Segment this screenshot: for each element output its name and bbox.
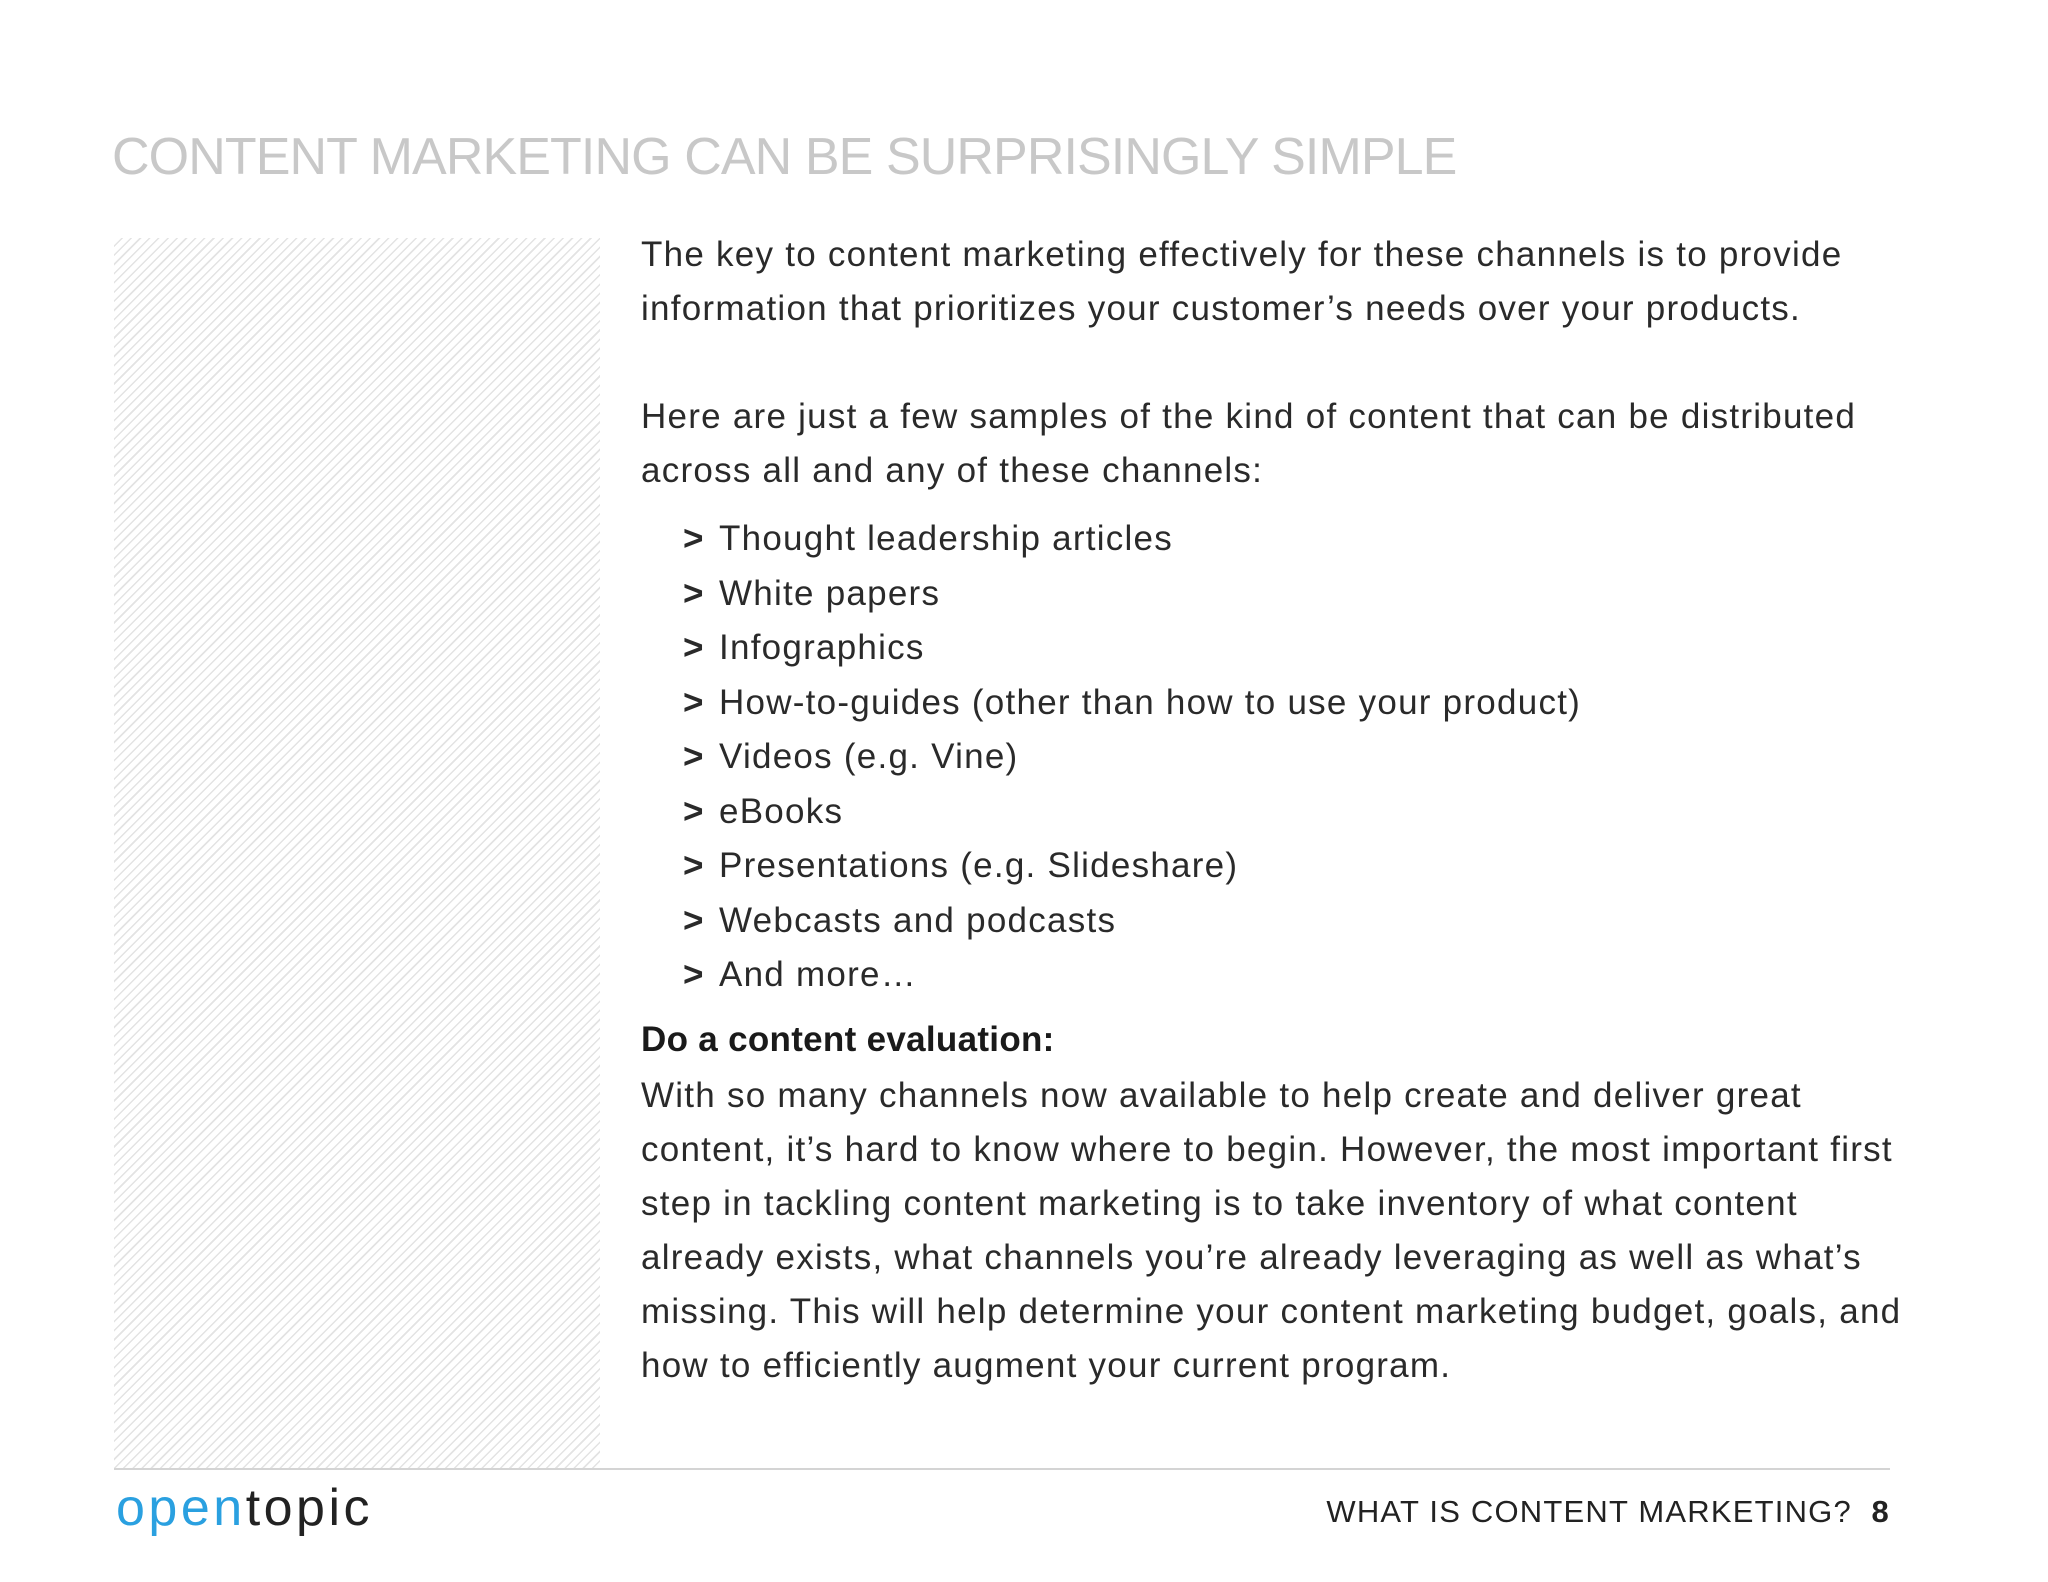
text block: evaluation paragraph — [641, 1076, 1901, 1385]
list: content types: > — [683, 682, 705, 722]
text block: samples intro: Here are just a few samples of the kind of content that can be distributed — [641, 397, 1856, 436]
list: content types: Videos (e.g. Vine) — [719, 737, 1018, 776]
list: content types: > — [683, 574, 705, 612]
text block: evaluation paragraph: content, it’s hard to know where to begin. However, the most important first — [641, 1130, 1893, 1169]
list: content types: > — [683, 900, 705, 940]
list: content types: Webcasts and podcasts — [719, 900, 1116, 940]
text block: evaluation paragraph: missing. This will help determine your content marketing budget, goals, and — [641, 1292, 1901, 1331]
text block: samples intro — [641, 397, 1856, 490]
text block: samples intro: across all and any of these channels: — [641, 451, 1263, 490]
list: content types: > — [683, 628, 705, 667]
text block: intro paragraph — [641, 235, 1842, 328]
list: content types: White papers — [719, 574, 940, 612]
list: content types: > — [683, 955, 705, 994]
text block: evaluation paragraph: step in tackling content marketing is to take inventory of what content — [641, 1184, 1798, 1223]
list: content types: eBooks — [719, 792, 843, 830]
list: content types: > — [683, 846, 705, 885]
list: content types: How-to-guides (other than how to use your product) — [719, 682, 1581, 722]
list: content types: Thought leadership articles — [719, 519, 1173, 558]
panel: hatched image placeholder — [114, 238, 600, 1469]
logo: opentopic: opentopic — [116, 1479, 373, 1537]
text block: evaluation paragraph: how to efficiently augment your current program. — [641, 1346, 1451, 1385]
text block: intro paragraph: information that prioritizes your customer’s needs over your products. — [641, 289, 1801, 328]
heading: content evaluation: Do a content evaluation: — [641, 1020, 1055, 1059]
text block: evaluation paragraph: With so many channels now available to help create and deliver great — [641, 1076, 1802, 1115]
list: content types: Infographics — [719, 628, 925, 667]
list: content types: > — [683, 737, 705, 776]
footer: page label and number: WHAT IS CONTENT MARKETING? 8 — [1326, 1494, 1890, 1529]
list: content types: > — [683, 792, 705, 830]
text block: evaluation paragraph: already exists, what channels you’re already leveraging as well as what’s — [641, 1238, 1862, 1277]
title: CONTENT MARKETING CAN BE SURPRISINGLY SIMPLE — [112, 128, 1456, 186]
text block: intro paragraph: The key to content marketing effectively for these channels is to provide — [641, 235, 1842, 274]
list: content types — [683, 519, 1581, 994]
list: content types: > — [683, 519, 705, 558]
list: content types: Presentations (e.g. Slideshare) — [719, 846, 1238, 885]
list: content types: And more… — [719, 955, 917, 994]
